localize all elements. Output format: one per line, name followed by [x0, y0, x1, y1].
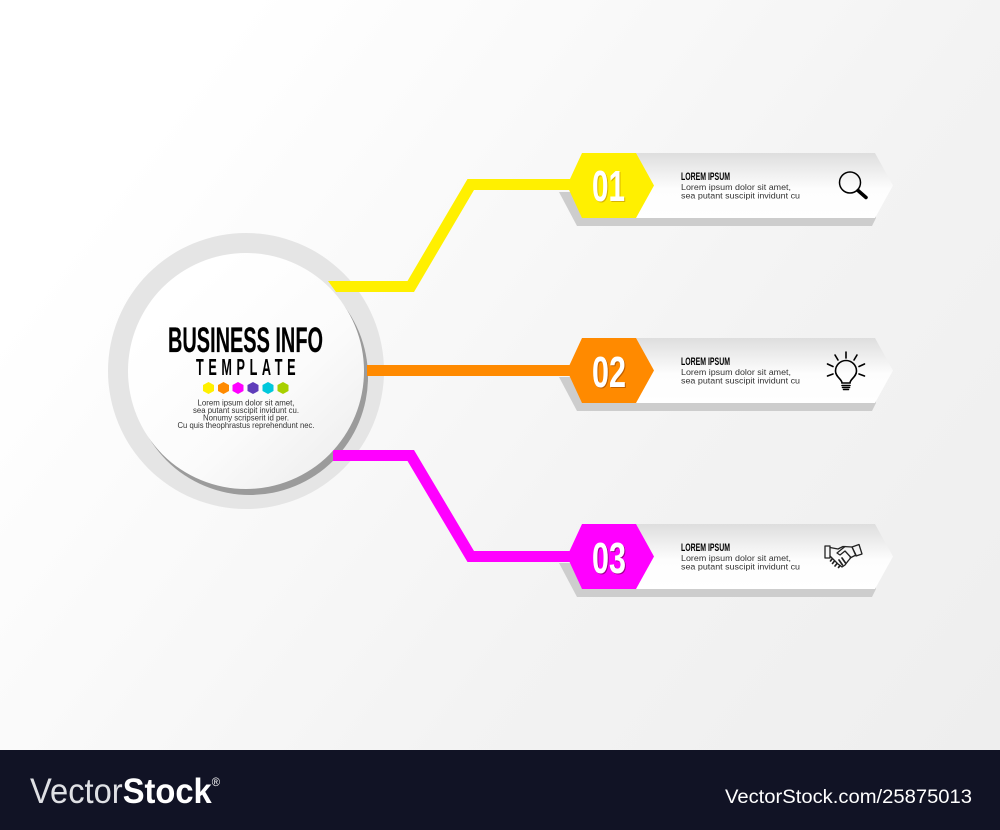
number: 01: [592, 162, 625, 211]
footer logo: ®: [212, 775, 220, 789]
footer logo: VectorStock: [30, 772, 218, 811]
colour hexagons: [203, 382, 288, 394]
icon: light bulb: [828, 352, 864, 390]
panel: step 02: [559, 338, 893, 411]
number: 03: [593, 535, 627, 584]
footer url: VectorStock.com/25875013: [725, 787, 972, 808]
circle face: [128, 253, 364, 489]
banner shadow: [559, 192, 876, 226]
description: [681, 367, 800, 386]
heading: LOREM IPSUM: [681, 171, 730, 183]
subtitle: TEMPLATE: [196, 354, 300, 380]
connector: magenta: [333, 450, 572, 562]
footer bar: [0, 750, 1000, 830]
number: 01: [593, 163, 626, 212]
panel: step 03: [559, 524, 893, 597]
number: 03: [592, 534, 626, 583]
number: 02: [593, 349, 627, 398]
banner body: [630, 153, 893, 218]
panel: step 01: [559, 153, 893, 226]
connector: orange: [367, 365, 572, 376]
number hexagon: [567, 153, 654, 218]
central circle panel: [128, 253, 364, 489]
connector: yellow: [328, 179, 572, 292]
banner body: [630, 524, 893, 589]
heading: LOREM IPSUM: [681, 542, 730, 554]
description: Lorem ipsum dolor sit amet,: [681, 182, 791, 192]
icon: handshake: [825, 544, 862, 568]
icon: magnifier: [840, 172, 866, 198]
banner body: [630, 338, 893, 403]
description: Lorem ipsum dolor sit amet,: [681, 367, 791, 377]
number hexagon: [567, 524, 654, 589]
heading: LOREM IPSUM: [681, 356, 730, 368]
circle description: [178, 398, 314, 430]
description: sea putant suscipit invidunt cu: [681, 562, 800, 572]
number hexagon: [567, 338, 654, 403]
circle description: Nonumy scripserit id per.: [203, 414, 289, 422]
number: [592, 162, 626, 212]
description: sea putant suscipit invidunt cu: [681, 376, 800, 386]
circle shadow: [132, 259, 368, 495]
description: sea putant suscipit invidunt cu: [681, 190, 800, 200]
description: Lorem ipsum dolor sit amet,: [681, 553, 791, 563]
description: [681, 553, 800, 572]
circle description: sea putant suscipit invidunt cu.: [193, 406, 299, 415]
description: [681, 182, 800, 200]
banner shadow: [559, 563, 876, 597]
number: 02: [592, 348, 626, 397]
banner shadow: [559, 377, 876, 411]
circle outer ring: [108, 233, 384, 509]
title: BUSINESS INFO: [168, 321, 323, 360]
circle description: Cu quis theophrastus reprehendunt nec.: [178, 421, 314, 430]
circle description: Lorem ipsum dolor sit amet,: [198, 398, 294, 408]
